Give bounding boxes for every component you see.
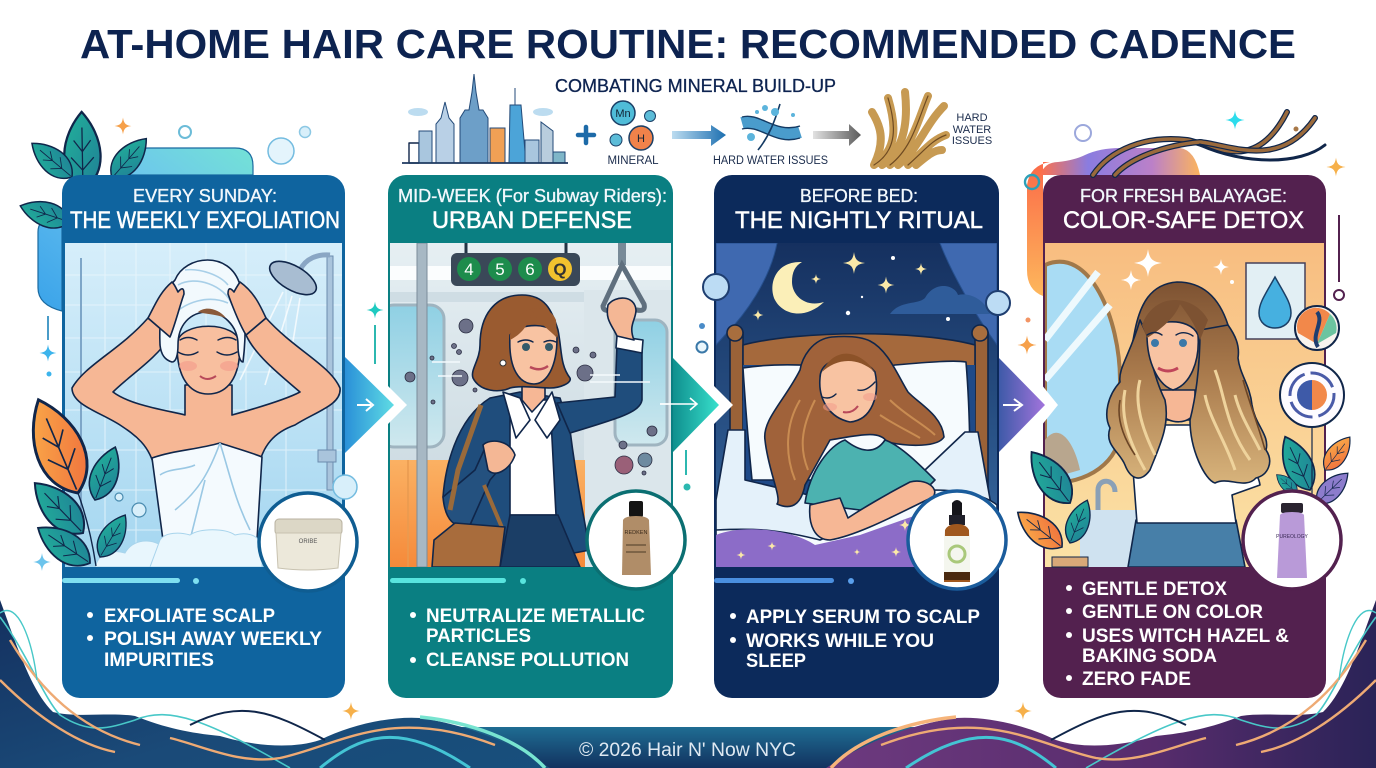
bullet list <box>1066 579 1289 690</box>
footer waves: centre band <box>420 727 960 768</box>
heading <box>70 186 340 234</box>
heading: BEFORE BED: <box>800 186 918 206</box>
panel card <box>1043 175 1326 698</box>
label: hard water issues side: HARD <box>956 112 988 124</box>
product: purple shampoo <box>1243 491 1341 589</box>
title: AT-HOME HAIR CARE ROUTINE: RECOMMENDED CADENCE <box>80 21 1296 67</box>
bullet list: ZERO FADE <box>1082 669 1191 690</box>
mineral build-up explainer <box>402 74 992 167</box>
panel: nightly ritual <box>714 175 1006 698</box>
heading: FOR FRESH BALAYAGE: <box>1080 186 1287 206</box>
icon: NYC skyline <box>402 74 568 163</box>
bullet list: CLEANSE POLLUTION <box>426 650 629 671</box>
bullet list <box>87 606 322 671</box>
bullet list: GENTLE ON COLOR <box>1082 602 1263 623</box>
heading: EVERY SUNDAY: <box>133 186 277 206</box>
arrow: step 1 to step 2 <box>345 357 407 453</box>
product: exfoliating jar <box>259 493 357 591</box>
illustration: woman on subway <box>390 243 671 567</box>
icon: mineral molecules: Mn <box>615 108 631 120</box>
footer waves: right <box>826 600 1376 768</box>
product: shampoo bottle <box>587 491 685 589</box>
footer copyright: © 2026 Hair N' Now NYC <box>579 740 796 761</box>
label: mineral: MINERAL <box>607 155 659 167</box>
icon: mineral molecules <box>610 101 656 150</box>
illustration: woman with balayage <box>1045 243 1324 570</box>
bullet list: APPLY SERUM TO SCALP <box>746 607 980 628</box>
panel: urban defense <box>380 175 700 698</box>
heading <box>735 186 983 234</box>
panel card <box>714 175 999 698</box>
icon: mineral molecules: H <box>637 133 645 145</box>
foliage: panel 1 top left <box>17 112 155 234</box>
foliage: panel 4 <box>1010 428 1357 567</box>
bullet list <box>410 606 645 671</box>
illustration: woman on subway: Q <box>553 260 567 279</box>
label: hard water issues: HARD WATER ISSUES <box>713 155 828 167</box>
icon: plus <box>578 127 594 143</box>
label: hard water issues side: ISSUES <box>952 135 992 147</box>
bullet list: POLISH AWAY WEEKLY <box>104 629 322 650</box>
bullet list: NEUTRALIZE METALLIC <box>426 606 645 627</box>
progress bar <box>390 578 526 584</box>
heading: THE NIGHTLY RITUAL <box>735 207 983 234</box>
icon: hard water pipe <box>742 104 800 150</box>
heading <box>1063 186 1304 234</box>
illustration: woman on subway: 4 <box>464 260 474 279</box>
product: serum dropper <box>908 491 1006 589</box>
arrow: step 2 to step 3 <box>660 358 733 452</box>
heading: MID-WEEK (For Subway Riders): <box>398 186 667 206</box>
arrow: blue <box>672 125 726 146</box>
bullet list: USES WITCH HAZEL & <box>1082 626 1289 647</box>
heading <box>398 186 667 234</box>
icon: damaged hair <box>872 92 946 165</box>
panel: color-safe detox <box>1010 175 1357 698</box>
backdrop blob: panel 4 <box>1027 148 1200 296</box>
bullet list: EXFOLIATE SCALP <box>104 606 275 627</box>
icon: colour cycle <box>1280 363 1344 427</box>
backdrop blob: panel 1 <box>38 148 253 311</box>
panel card <box>62 175 345 698</box>
progress bar <box>62 578 199 584</box>
heading: COLOR-SAFE DETOX <box>1063 207 1304 234</box>
foliage: panel 1 bottom left <box>17 391 135 575</box>
label: hard water issues side: WATER <box>953 124 991 136</box>
bullet list: GENTLE DETOX <box>1082 579 1227 600</box>
flowing hair strands <box>1093 112 1325 175</box>
progress bar <box>714 578 854 584</box>
panel card <box>388 175 673 698</box>
heading: THE WEEKLY EXFOLIATION <box>70 207 340 234</box>
product: exfoliating jar: ORIBE <box>299 539 317 545</box>
bullet list: PARTICLES <box>426 626 531 647</box>
illustration: woman on subway: 5 <box>495 260 505 279</box>
heading: URBAN DEFENSE <box>432 207 632 234</box>
illustration: woman on subway: 6 <box>525 260 535 279</box>
bullet list: WORKS WHILE YOU <box>746 631 934 652</box>
bullet list: IMPURITIES <box>104 650 214 671</box>
illustration: woman asleep in bed <box>716 243 997 572</box>
bullet list <box>730 607 980 672</box>
panel: weekly exfoliation <box>62 175 357 698</box>
arrow: grey <box>813 124 861 146</box>
illustration: woman in shower <box>65 243 342 567</box>
product: purple shampoo: PUREOLOGY <box>1276 534 1308 540</box>
subtitle: COMBATING MINERAL BUILD-UP <box>555 76 836 96</box>
icon: colour gauge <box>1295 306 1339 350</box>
decorative sparkles and bubbles <box>33 110 1346 720</box>
arrow: step 3 to step 4 <box>999 358 1058 452</box>
bullet list: SLEEP <box>746 651 806 672</box>
product: shampoo bottle: REDKEN <box>625 530 647 536</box>
footer waves: left <box>0 600 550 768</box>
bullet list: BAKING SODA <box>1082 646 1217 667</box>
